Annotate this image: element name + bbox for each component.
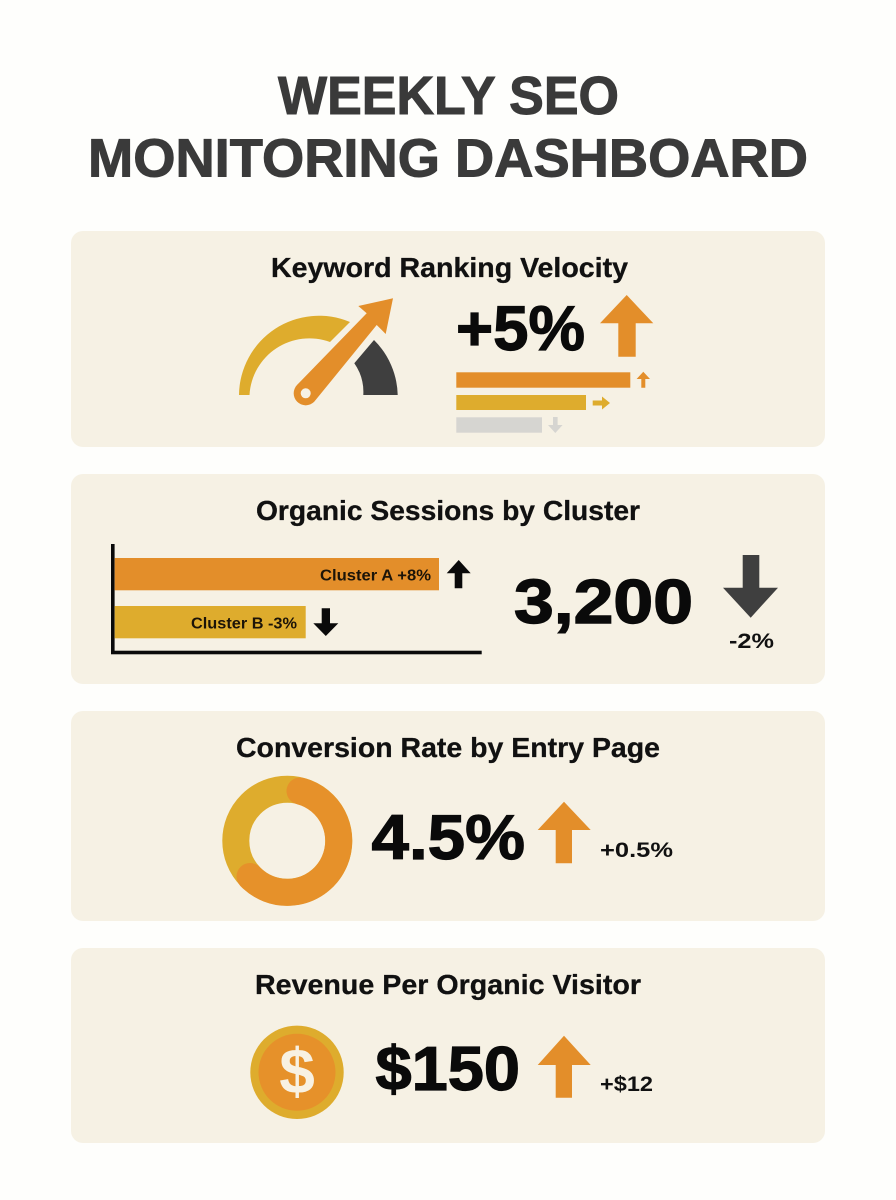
heading: keyword ranking velocity: Keyword Ranking Velocity <box>271 252 628 283</box>
bar: cluster A: Cluster A +8% <box>320 568 431 585</box>
bar: gray with down arrow <box>456 417 563 433</box>
delta: +0.5%: +0.5% <box>600 838 673 862</box>
panel: organic sessions by cluster <box>71 474 825 684</box>
bar: cluster A <box>115 558 471 590</box>
panel: keyword ranking velocity <box>71 231 825 447</box>
title: WEEKLY SEO <box>278 66 619 126</box>
icon: down arrow <box>723 555 778 618</box>
bar chart: clusters <box>111 544 482 654</box>
title <box>88 66 808 188</box>
title: MONITORING DASHBOARD <box>88 128 808 188</box>
bar: orange with up arrow <box>456 372 650 388</box>
heading: organic sessions by cluster: Organic Sessions by Cluster <box>256 495 640 526</box>
icon: up arrow <box>538 1036 591 1098</box>
metric: 3,200: 3,200 <box>514 568 693 637</box>
metric: $150: $150 <box>376 1035 520 1104</box>
icon: dollar coin <box>250 1026 344 1119</box>
bar: cluster B <box>115 606 338 638</box>
heading: conversion rate by entry page: Conversion Rate by Entry Page <box>236 732 660 763</box>
icon: dollar coin: $ <box>279 1035 315 1107</box>
metric: +5%: +5% <box>456 294 585 364</box>
icon: up arrow <box>538 802 591 863</box>
heading: revenue per organic visitor: Revenue Per Organic Visitor <box>255 969 641 1000</box>
delta: +$12: +$12 <box>600 1072 653 1096</box>
icon: gauge with arrow <box>239 298 398 405</box>
panel: conversion rate by entry page <box>71 711 825 921</box>
metric: 4.5%: 4.5% <box>372 803 525 873</box>
delta: -2%: -2% <box>729 629 774 653</box>
panel: revenue per organic visitor <box>71 948 825 1143</box>
icon: up arrow <box>600 295 653 357</box>
bar: yellow with right arrow <box>456 395 610 410</box>
donut chart <box>236 789 339 892</box>
bar: cluster B: Cluster B -3% <box>191 615 297 632</box>
